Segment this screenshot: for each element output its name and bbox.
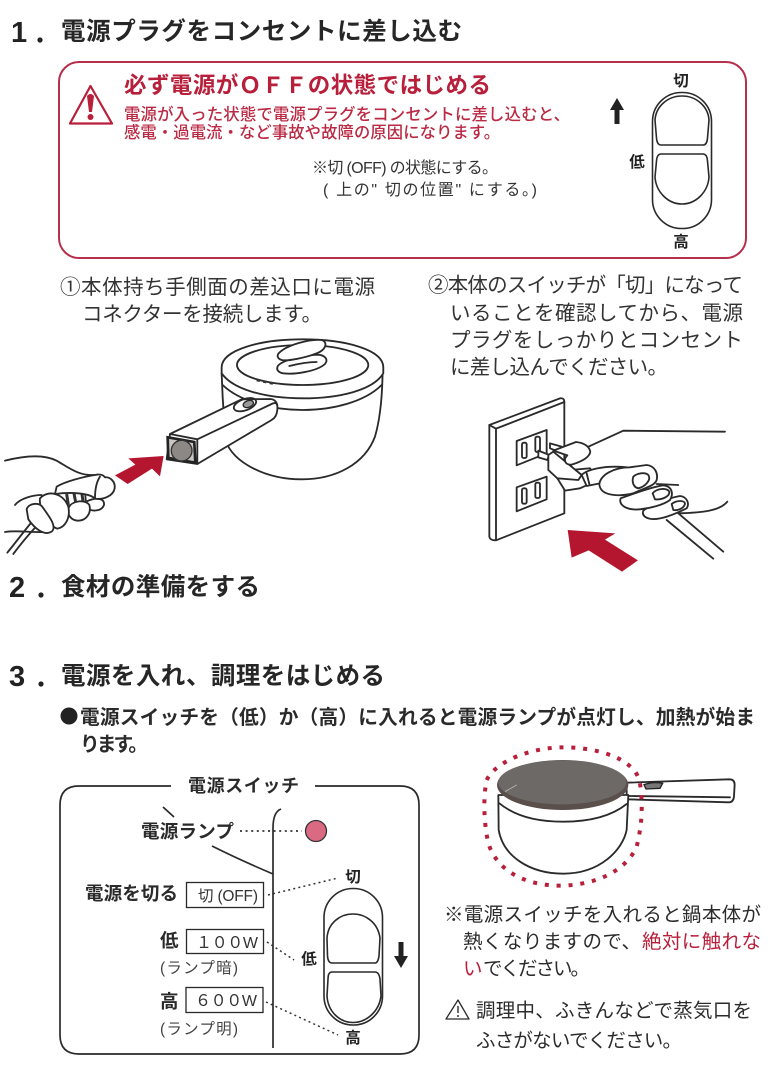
- instruction 1 text: [60, 276, 375, 326]
- step 1 heading: 電源プラグをコンセントに差し込む: [61, 16, 462, 46]
- panel: power switch: [60, 776, 419, 1054]
- pan lid: [222, 339, 383, 410]
- box: 100W: １００W: [196, 935, 259, 952]
- instruction 2 text: に差し込んでください。: [450, 356, 668, 379]
- icon: down arrow: [394, 942, 408, 968]
- step 1 heading: 1: [11, 17, 27, 49]
- label: low: [160, 930, 238, 977]
- instruction 2 text: プラグをしっかりとコンセント: [450, 329, 743, 352]
- hot surface caution text: ※電源スイッチを入れると鍋本体が: [444, 904, 761, 926]
- panel title: 電源スイッチ: [188, 776, 299, 796]
- step 3 instruction text: [60, 706, 755, 756]
- lamp leader: [240, 830, 302, 832]
- steam vent caution text: [476, 1000, 752, 1052]
- steam vent caution text: ふさがないでください。: [476, 1030, 682, 1052]
- hot surface caution text: 熱くなりますので、: [463, 931, 641, 953]
- power lamp label: 電源ランプ: [141, 821, 234, 842]
- box: 600W: ６００W: [195, 993, 258, 1010]
- pan handle: [167, 395, 277, 464]
- hot surface caution text: でください。: [483, 958, 590, 980]
- pan lid dark top: [497, 760, 628, 810]
- label: low: 低: [160, 930, 179, 951]
- switch diagram: OFF position: 低: [629, 153, 645, 171]
- box: 100W: [186, 930, 264, 954]
- red dotted outline: [484, 747, 642, 886]
- switch diagram: OFF position: [629, 72, 712, 251]
- switch diagram: low/high: 低: [301, 950, 317, 968]
- leader lines: [266, 878, 338, 1035]
- label: power off: 電源を切る: [85, 883, 178, 904]
- instruction 1 text: ①本体持ち手側面の差込口に電源: [60, 276, 375, 299]
- label: low: (ランプ暗): [160, 959, 238, 977]
- note: switch to OFF: [312, 159, 537, 199]
- switch diagram: low/high: [301, 868, 382, 1047]
- panel: OFF warning: [59, 62, 746, 258]
- warning text: 感電・過電流・など事故や故障の原因になります。: [124, 124, 500, 142]
- step 3 heading: 3: [9, 661, 25, 693]
- step 2 heading: [9, 572, 260, 604]
- red arrow: [568, 530, 638, 572]
- hot surface caution text: [444, 904, 761, 980]
- hot surface caution text: 絶対に触れな: [642, 931, 761, 953]
- box: 600W: [186, 988, 263, 1012]
- warning text: [124, 105, 570, 142]
- warning heading: 必ず電源がＯＦＦの状態ではじめる: [124, 72, 491, 98]
- switch diagram: low/high: 高: [345, 1029, 361, 1047]
- pan handle: [627, 779, 735, 802]
- hand with connector: [5, 456, 115, 554]
- switch diagram: OFF position: 切: [673, 72, 689, 90]
- illustration: pan with connector and hand: [5, 339, 383, 554]
- warning text: 電源が入った状態で電源プラグをコンセントに差し込むと、: [124, 105, 570, 124]
- illustration: hot pan with dotted outline: [484, 747, 735, 886]
- icon: up arrow: [610, 98, 624, 124]
- hot surface caution text: い: [463, 958, 483, 980]
- label: high: (ランプ明): [160, 1020, 238, 1038]
- step 2 heading: 食材の準備をする: [61, 573, 260, 601]
- instruction 2 text: ②本体のスイッチが「切」になって: [428, 274, 743, 297]
- switch diagram: OFF position: 高: [673, 233, 689, 251]
- label: high: [160, 991, 238, 1038]
- pan body: [498, 795, 628, 874]
- step 3 instruction text: ります。: [80, 734, 148, 756]
- illustration: outlet with plug and hand: [489, 398, 727, 572]
- box: OFF: [186, 882, 264, 908]
- step 3 instruction text: 電源スイッチを（低）か（高）に入れると電源ランプが点灯し、加熱が始ま: [80, 706, 755, 729]
- icon: caution triangle: [446, 1000, 469, 1019]
- note: switch to OFF: ( 上の" 切の位置" にする。): [323, 181, 537, 199]
- instruction 2 text: いることを確認してから、電源: [450, 302, 743, 325]
- steam vent caution text: 調理中、ふきんなどで蒸気口を: [476, 1000, 752, 1022]
- step 3 heading: 電源を入れ、調理をはじめる: [61, 662, 385, 690]
- icon: warning triangle: [70, 86, 112, 124]
- plug and hand: [538, 431, 727, 559]
- red arrow: [115, 456, 164, 484]
- note: switch to OFF: ※切 (OFF) の状態にする。: [312, 159, 498, 177]
- pan body: [222, 370, 383, 479]
- instruction 2 text: [428, 274, 743, 379]
- step 2 heading: 2: [9, 572, 25, 604]
- instruction 1 text: コネクターを接続します。: [82, 303, 322, 326]
- label: high: 高: [160, 991, 179, 1012]
- wall outlet plate: [489, 398, 564, 540]
- box: OFF: 切 (OFF): [198, 887, 258, 905]
- switch diagram: low/high: 切: [345, 868, 361, 886]
- appliance outline: [163, 807, 281, 1048]
- icon: power lamp: [306, 820, 326, 842]
